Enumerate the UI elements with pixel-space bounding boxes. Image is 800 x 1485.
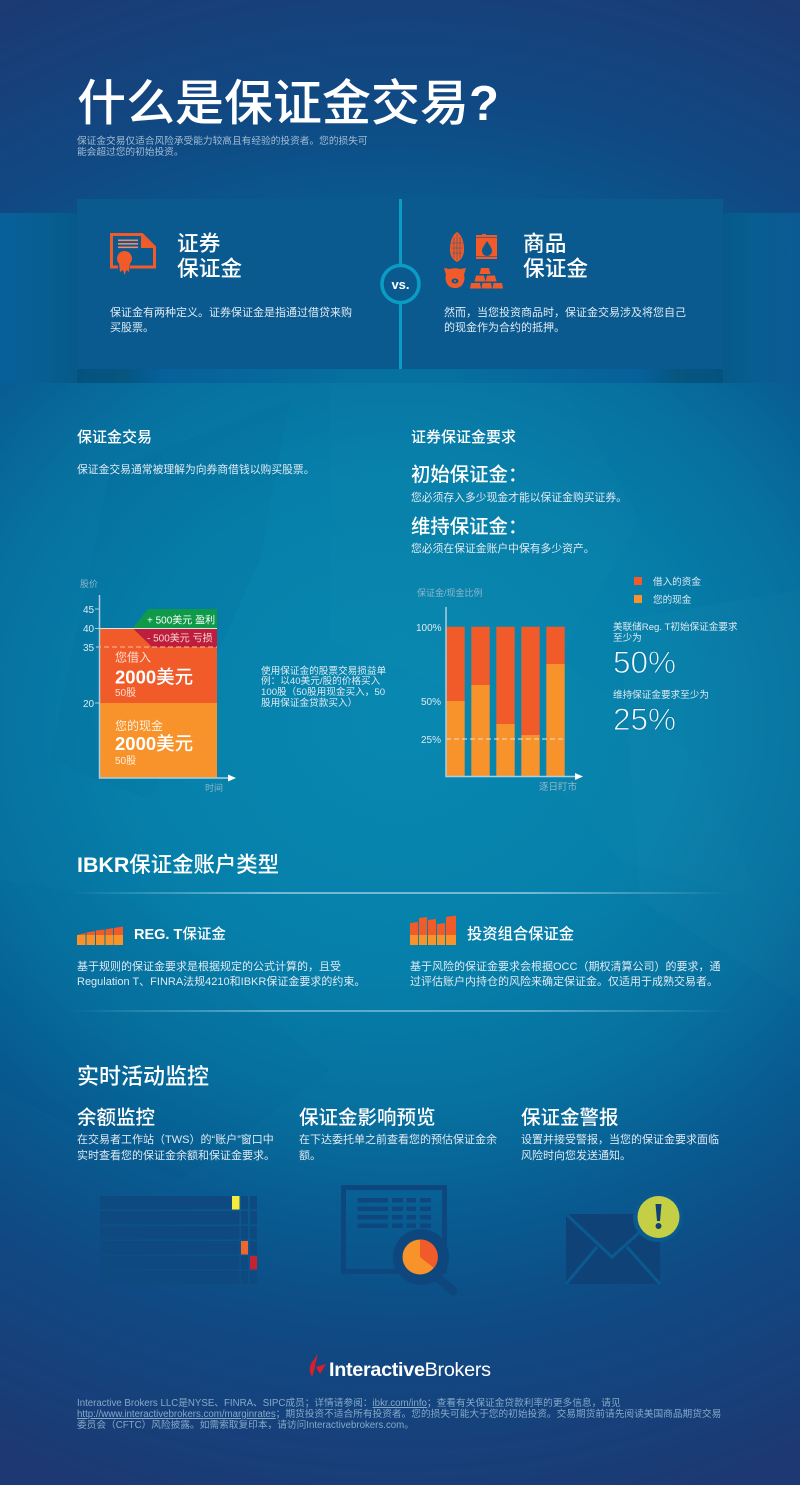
heading: securities margin requirements: 证券保证金要求 bbox=[411, 429, 516, 446]
heading: maintenance margin: 维持保证金： bbox=[411, 516, 527, 538]
text: balance monitoring: 在交易者工作站（TWS）的“账户”窗口中 bbox=[77, 1134, 274, 1146]
text: Reg T margin bbox=[77, 960, 365, 988]
text: Reg T requirement: 美联储Reg. T初始保证金要求 bbox=[613, 622, 738, 633]
text: chart caption bbox=[261, 666, 386, 709]
text: securities margin: 买股票。 bbox=[110, 322, 154, 334]
text: Reg T requirement bbox=[613, 622, 738, 644]
corner shadow right bbox=[640, 369, 723, 383]
center band under panel bbox=[160, 369, 640, 383]
subtitle: 能会超过您的初始投资。 bbox=[77, 146, 184, 158]
icon: logo flame bbox=[310, 1353, 326, 1377]
footer disclaimer: Interactive Brokers LLC是NYSE、FINRA、SIPC成员；详情请参阅：ibkr.com/info；查看有关保证金贷款利率的更多信息，请见 bbox=[77, 1398, 621, 1409]
text: Reg T margin: 基于规则的保证金要求是根据规定的公式计算的，且受 bbox=[77, 960, 341, 972]
heading: margin trading: 保证金交易 bbox=[77, 429, 152, 446]
legend: your cash bbox=[634, 594, 691, 606]
axis label: share price: 股价 bbox=[80, 579, 98, 589]
heading: real-time monitoring: 实时活动监控 bbox=[77, 1064, 209, 1089]
icon: portfolio bars bbox=[410, 916, 456, 945]
text: margin alerts: 设置并接受警报，当您的保证金要求面临 bbox=[521, 1134, 719, 1146]
heading: Reg T margin: REG. T保证金 bbox=[134, 927, 226, 943]
text: margin alerts: 风险时向您发送通知。 bbox=[521, 1150, 631, 1162]
panel: comparison bbox=[77, 199, 723, 369]
chart: margin/cash ratio bbox=[416, 587, 583, 793]
icon: commodities bbox=[444, 232, 503, 288]
heading: securities margin: 证券 bbox=[177, 231, 220, 256]
tick labels: 20 bbox=[83, 699, 95, 710]
text: chart caption: 股用保证金贷款买入） bbox=[261, 698, 357, 709]
tick labels bbox=[83, 605, 95, 710]
subtitle bbox=[77, 136, 368, 158]
text: chart caption: 100股（50股用现金买入，50 bbox=[261, 687, 385, 698]
label: profit: + 500美元 盈利 bbox=[147, 614, 215, 626]
logo bbox=[310, 1353, 491, 1381]
legend: your cash: 您的现金 bbox=[653, 595, 691, 606]
tick labels: 25% bbox=[421, 735, 441, 746]
side band right bbox=[723, 213, 800, 383]
label: your cash: 50股 bbox=[115, 755, 136, 767]
text: securities margin bbox=[110, 306, 352, 334]
footer disclaimer: 委员会（CFTC）风险披露。如需索取复印本，请访问Interactivebrokers.com。 bbox=[77, 1420, 414, 1431]
heading: commodities margin: 保证金 bbox=[523, 256, 588, 281]
tick labels: 45 bbox=[83, 605, 95, 616]
legend: borrowed funds: 借入的资金 bbox=[653, 577, 701, 588]
text: maintenance margin: 您必须在保证金账户中保有多少资产。 bbox=[411, 543, 595, 555]
stat: 25%: 25% bbox=[613, 701, 676, 737]
label: borrowed: 您借入 bbox=[115, 650, 151, 664]
label: loss: - 500美元 亏损 bbox=[147, 632, 213, 644]
text: margin impact preview bbox=[299, 1134, 497, 1162]
icon: envelope with alert bbox=[565, 1196, 682, 1285]
text: balance monitoring bbox=[77, 1134, 275, 1162]
text: chart caption: 例：以40美元/股的价格买入 bbox=[261, 676, 380, 687]
text: chart caption: 使用保证金的股票交易损益单 bbox=[261, 666, 386, 676]
text: portfolio margin: 过评估账户内持仓的风险来确定保证金。仅适用于成熟交易者。 bbox=[410, 976, 718, 988]
heading: account types: IBKR保证金账户类型 bbox=[77, 853, 279, 877]
heading: securities margin: 保证金 bbox=[177, 256, 242, 281]
heading: portfolio margin: 投资组合保证金 bbox=[467, 926, 574, 943]
footer disclaimer: http://www.interactivebrokers.com/marginrates；期货投资不适合所有投资者。您的损失可能大于您的初始投资。交易期货前请先阅读美国商品期货交易 bbox=[77, 1409, 721, 1420]
text: portfolio margin bbox=[410, 960, 720, 988]
footer disclaimer bbox=[77, 1398, 721, 1431]
text: securities margin: 保证金有两种定义。证券保证金是指通过借贷来购 bbox=[110, 306, 352, 318]
axis label: 保证金/现金比例 bbox=[417, 587, 483, 598]
logo text: InteractiveBrokers bbox=[329, 1359, 491, 1381]
text: maintenance requirement: 维持保证金要求至少为 bbox=[613, 690, 709, 701]
text: margin impact preview: 额。 bbox=[299, 1150, 321, 1162]
stat: 50%: 50% bbox=[613, 644, 676, 680]
text: commodities margin: 的现金作为合约的抵押。 bbox=[444, 322, 565, 334]
label: borrowed: 2000美元 bbox=[115, 666, 193, 688]
text: margin trading: 保证金交易通常被理解为向券商借钱以购买股票。 bbox=[77, 464, 315, 476]
label: borrowed bbox=[115, 650, 193, 699]
heading: margin impact preview: 保证金影响预览 bbox=[299, 1107, 436, 1129]
subtitle: 保证金交易仅适合风险承受能力较高且有经验的投资者。您的损失可 bbox=[77, 136, 368, 147]
text: commodities margin bbox=[444, 306, 686, 334]
tick labels: 40 bbox=[83, 624, 95, 635]
heading: initial margin: 初始保证金： bbox=[411, 464, 527, 486]
axis label: daily mark to market: 逐日盯市 bbox=[539, 781, 578, 793]
label: your cash bbox=[115, 718, 193, 767]
title: 什么是保证金交易? bbox=[77, 77, 499, 131]
side band left bbox=[0, 213, 77, 383]
heading: commodities margin: 商品 bbox=[523, 231, 566, 256]
tick labels: 100% bbox=[416, 623, 442, 634]
legend: borrowed funds bbox=[634, 576, 701, 588]
axis label: time: 时间 bbox=[205, 782, 223, 793]
vs divider: vs. bbox=[391, 277, 410, 292]
chart: margin P&L example bbox=[80, 579, 236, 793]
text: Reg T margin: Regulation T、FINRA法规4210和IBKR保证金要求的约束。 bbox=[77, 976, 365, 988]
tick labels: 35 bbox=[83, 643, 95, 654]
heading: balance monitoring: 余额监控 bbox=[77, 1107, 155, 1129]
text: commodities margin: 然而，当您投资商品时，保证金交易涉及将您自己 bbox=[444, 306, 686, 318]
tick labels: 50% bbox=[421, 697, 441, 708]
text: initial margin: 您必须存入多少现金才能以保证金购买证券。 bbox=[411, 492, 627, 504]
corner shadow left bbox=[77, 369, 162, 383]
heading: commodities margin bbox=[523, 231, 588, 281]
icon: balance table bbox=[100, 1196, 257, 1284]
text: Reg T requirement: 至少为 bbox=[613, 633, 642, 644]
label: borrowed: 50股 bbox=[115, 687, 136, 699]
heading: margin alerts: 保证金警报 bbox=[521, 1107, 619, 1129]
text: margin impact preview: 在下达委托单之前查看您的预估保证金余 bbox=[299, 1134, 497, 1146]
text: margin alerts bbox=[521, 1134, 719, 1162]
legend bbox=[634, 576, 701, 606]
icon: document with magnifier bbox=[341, 1185, 458, 1296]
icon: certificate bbox=[110, 233, 156, 275]
text: balance monitoring: 实时查看您的保证金余额和保证金要求。 bbox=[77, 1150, 275, 1162]
vs divider bbox=[380, 199, 421, 369]
label: your cash: 2000美元 bbox=[115, 733, 193, 754]
text: portfolio margin: 基于风险的保证金要求会根据OCC（期权清算公司）的要求，通 bbox=[410, 960, 720, 972]
heading: securities margin bbox=[177, 231, 242, 281]
tick labels bbox=[416, 623, 442, 746]
icon: Reg T bars bbox=[77, 926, 123, 945]
label: your cash: 您的现金 bbox=[115, 718, 163, 733]
